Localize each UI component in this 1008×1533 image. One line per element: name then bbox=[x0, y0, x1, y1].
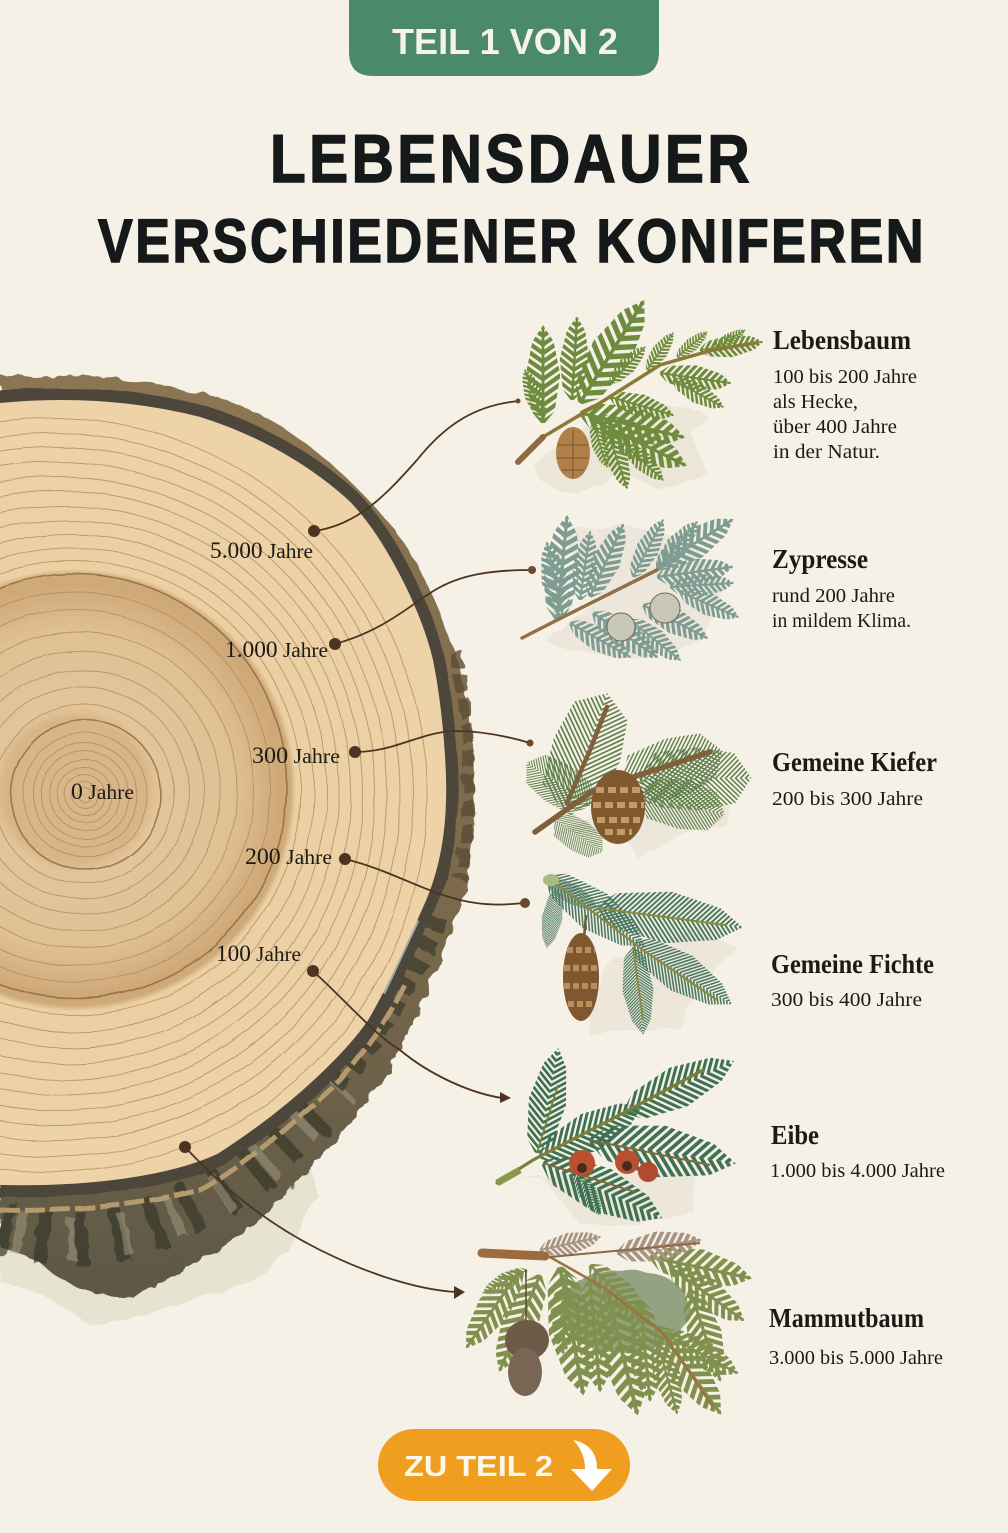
label: Lebensbaum: in der Natur. bbox=[773, 441, 880, 463]
label: Mammutbaum bbox=[769, 1303, 943, 1369]
label: Zypresse: rund 200 Jahre bbox=[772, 585, 895, 607]
age labels on the trunk: 300 Jahre bbox=[252, 743, 340, 768]
label: Zypresse bbox=[772, 544, 911, 632]
sprig: Mammutbaum bbox=[451, 1229, 768, 1436]
bark furrows bbox=[0, 650, 468, 1239]
label: Mammutbaum: 3.000 bis 5.000 Jahre bbox=[769, 1347, 943, 1369]
title: LEBENSDAUER bbox=[270, 121, 753, 197]
icon: curved arrow bbox=[571, 1440, 612, 1491]
label: Gemeine Kiefer bbox=[772, 747, 937, 810]
button: to part 2 bbox=[378, 1429, 630, 1501]
label: Eibe: Eibe bbox=[771, 1120, 819, 1150]
label: Lebensbaum: 100 bis 200 Jahre bbox=[773, 366, 917, 388]
outer bark bbox=[0, 375, 475, 1297]
pale highlight on rim bbox=[383, 920, 417, 993]
sprig: Eibe bbox=[497, 1030, 760, 1237]
sprig: Zypresse bbox=[522, 499, 750, 671]
badge: part 1 of 2: TEIL 1 VON 2 bbox=[392, 21, 618, 62]
connector: Eibe bbox=[307, 965, 511, 1103]
connector: Gemeine Kiefer bbox=[349, 731, 534, 758]
title bbox=[98, 121, 926, 275]
age labels on the trunk bbox=[71, 538, 340, 966]
label: Gemeine Kiefer: 200 bis 300 Jahre bbox=[772, 788, 923, 810]
label: Eibe: 1.000 bis 4.000 Jahre bbox=[770, 1160, 945, 1182]
label: Mammutbaum: Mammutbaum bbox=[769, 1303, 924, 1333]
label: Lebensbaum bbox=[773, 325, 917, 463]
label: Gemeine Kiefer: Gemeine Kiefer bbox=[772, 747, 937, 777]
label: Zypresse: in mildem Klima. bbox=[772, 610, 911, 632]
tan cut edge bbox=[0, 985, 405, 1210]
label: Gemeine Fichte: Gemeine Fichte bbox=[771, 949, 934, 979]
tree trunk cross-section bbox=[0, 375, 475, 1325]
label: Lebensbaum: über 400 Jahre bbox=[773, 416, 897, 438]
connector: Mammutbaum bbox=[179, 1141, 465, 1299]
label: Gemeine Fichte bbox=[771, 949, 934, 1011]
sprig: Lebensbaum bbox=[518, 280, 773, 499]
cut face bbox=[0, 401, 445, 1184]
label: Lebensbaum: als Hecke, bbox=[773, 391, 858, 413]
badge: part 1 of 2 bbox=[349, 0, 659, 76]
ground shadow wash bbox=[0, 1165, 318, 1325]
button: to part 2: ZU TEIL 2 bbox=[404, 1451, 553, 1483]
label: Zypresse: Zypresse bbox=[772, 544, 868, 574]
age labels on the trunk: 200 Jahre bbox=[245, 844, 332, 869]
connector: Gemeine Fichte bbox=[339, 853, 530, 908]
sprig: Gemeine Kiefer bbox=[509, 666, 772, 864]
growth rings bbox=[0, 418, 427, 1172]
age labels on the trunk: 0 Jahre bbox=[71, 779, 134, 804]
label: Eibe bbox=[770, 1120, 945, 1182]
dark inner bark rim bbox=[0, 401, 445, 1184]
label: Gemeine Fichte: 300 bis 400 Jahre bbox=[771, 989, 922, 1011]
label: Lebensbaum: Lebensbaum bbox=[773, 325, 911, 355]
connector: Zypresse bbox=[329, 566, 536, 650]
connector: Lebensbaum bbox=[308, 398, 520, 537]
age labels on the trunk: 5.000 Jahre bbox=[210, 538, 313, 563]
age labels on the trunk: 1.000 Jahre bbox=[225, 637, 328, 662]
age labels on the trunk: 100 Jahre bbox=[216, 941, 301, 966]
sprig: Gemeine Fichte bbox=[529, 860, 767, 1049]
